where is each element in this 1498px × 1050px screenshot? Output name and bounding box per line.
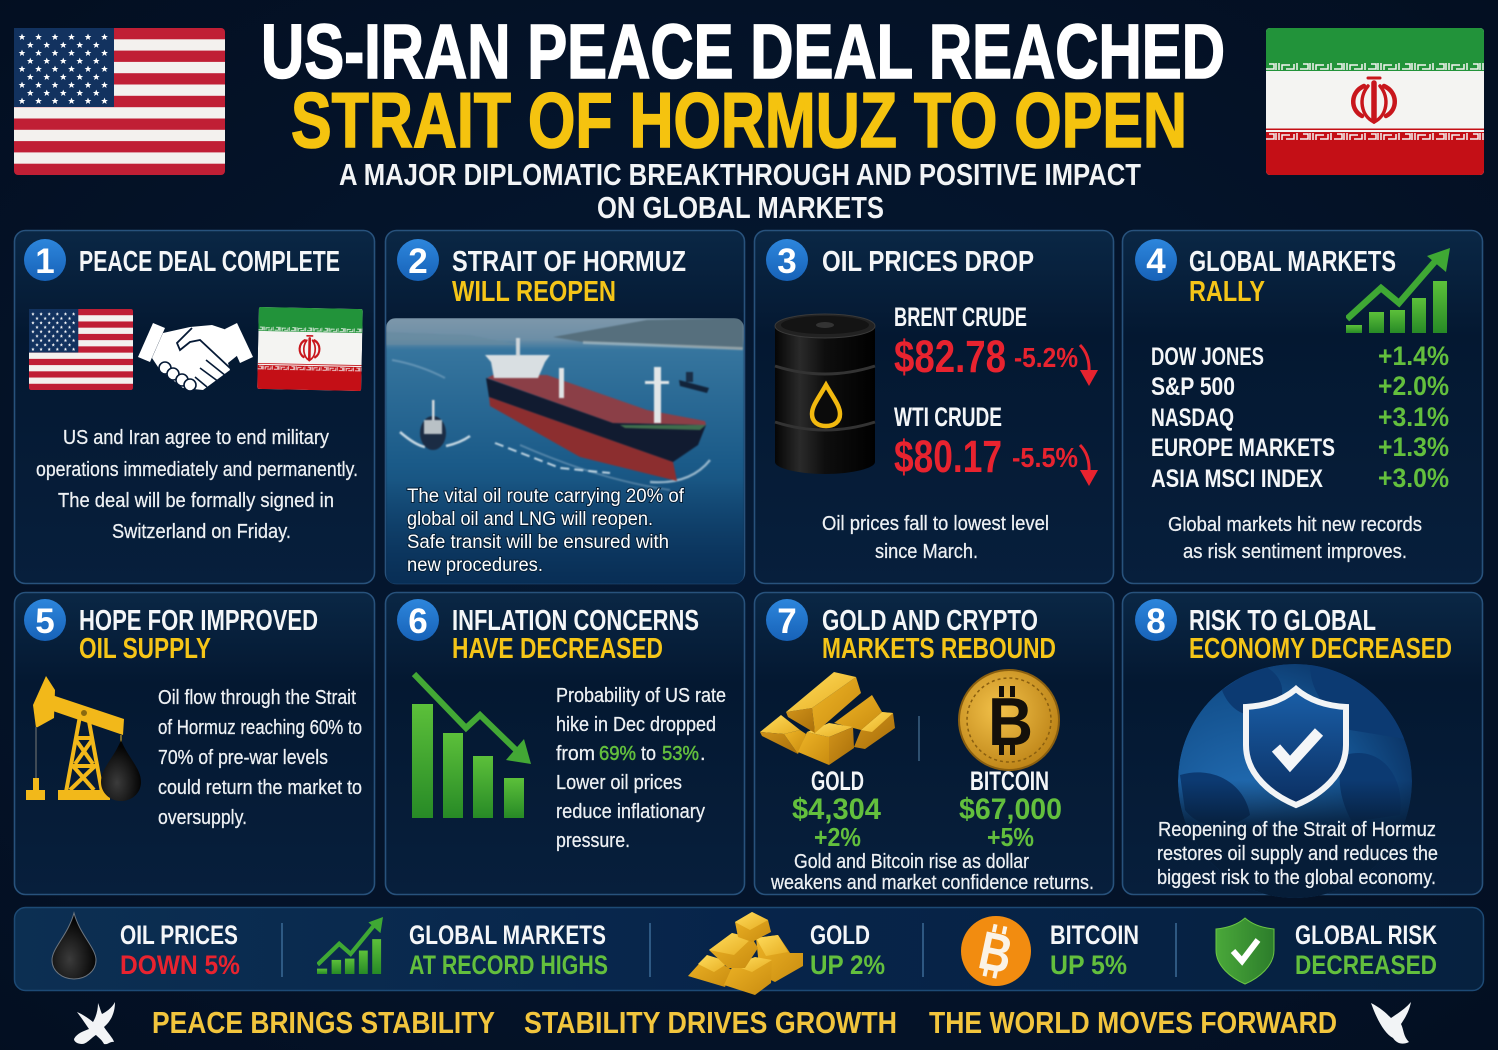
- icon: oil barrel: [775, 314, 875, 474]
- ship caption: global oil and LNG will reopen.: [407, 508, 653, 530]
- WTI crude price: -5.5%: [1012, 442, 1078, 473]
- summary: gold: [688, 912, 885, 995]
- body text 6: Lower oil prices: [556, 772, 682, 794]
- body text 6: [556, 685, 726, 852]
- body text 3: since March.: [875, 541, 978, 563]
- heading 5: HOPE FOR IMPROVED: [79, 605, 318, 637]
- body text 5: [158, 687, 362, 829]
- market index table: NASDAQ: [1151, 404, 1234, 432]
- number badge 2: [397, 239, 439, 281]
- body text 5: Oil flow through the Strait: [158, 687, 356, 709]
- summary: global markets: [317, 917, 608, 980]
- arrow: down: [1080, 345, 1098, 386]
- Brent crude price: -5.2%: [1014, 342, 1078, 373]
- icon: gold bars: [760, 672, 895, 765]
- ship text shade: [386, 512, 744, 584]
- number badge 2: 2: [408, 242, 428, 281]
- bitcoin price: [959, 766, 1062, 852]
- heading 7: [822, 605, 1056, 665]
- body text 1: The deal will be formally signed in: [58, 490, 334, 512]
- body text 4: [1168, 514, 1422, 563]
- WTI crude price: [894, 402, 1098, 486]
- chart: falling bars: [412, 674, 531, 818]
- icon: globe with shield: [1170, 664, 1420, 905]
- body text 5: of Hormuz reaching 60% to: [158, 717, 362, 739]
- number badge 4: 4: [1146, 242, 1166, 281]
- footer slogan: THE WORLD MOVES FORWARD: [929, 1005, 1337, 1040]
- ship caption: The vital oil route carrying 20% of: [407, 485, 685, 507]
- heading 8: [1189, 605, 1452, 665]
- title: [261, 9, 1225, 164]
- WTI crude price: WTI CRUDE: [894, 402, 1002, 432]
- icon: dove right: [1371, 1002, 1411, 1044]
- body text 1: US and Iran agree to end military: [63, 427, 329, 449]
- market index table: EUROPE MARKETS: [1151, 434, 1335, 462]
- body text 6: reduce inflationary: [556, 801, 705, 823]
- Brent crude price: [894, 302, 1098, 386]
- number badge 8: 8: [1146, 602, 1166, 641]
- market index table: S&P 500: [1151, 373, 1235, 401]
- summary: global risk: DECREASED: [1295, 950, 1437, 980]
- body text 4: as risk sentiment improves.: [1183, 541, 1407, 563]
- icon: bitcoin coin: [959, 670, 1059, 770]
- panel 7: gold and crypto: [754, 592, 1114, 894]
- shield: [1246, 689, 1346, 805]
- heading 1: PEACE DEAL COMPLETE: [79, 246, 340, 278]
- number badge 7: [766, 599, 808, 641]
- icon: green shield: [1216, 918, 1274, 984]
- footer slogan: PEACE BRINGS STABILITY: [152, 1005, 495, 1040]
- body text 8: Reopening of the Strait of Hormuz: [1158, 819, 1436, 841]
- body text 6: hike in Dec dropped: [556, 714, 716, 736]
- icon: oil pumpjack: [26, 676, 141, 801]
- WTI crude price: $80.17: [894, 431, 1002, 482]
- body text 5: 70% of pre-war levels: [158, 747, 328, 769]
- flag: Iran: [1266, 28, 1484, 175]
- body text 8: [1157, 819, 1438, 889]
- body text 8: restores oil supply and reduces the: [1157, 843, 1438, 865]
- summary: bitcoin: [961, 916, 1139, 986]
- gold price: [792, 766, 881, 852]
- heading 8: RISK TO GLOBAL: [1189, 605, 1376, 637]
- number badge 4: [1135, 239, 1177, 281]
- heading 6: [452, 605, 699, 665]
- small flag: Iran: [257, 307, 363, 391]
- market index table: ASIA MSCI INDEX: [1151, 465, 1323, 493]
- icon: bitcoin coin: B: [988, 684, 1033, 760]
- bitcoin price: BITCOIN: [970, 766, 1049, 796]
- icon: oil drop: [52, 913, 96, 979]
- body text 3: [822, 513, 1049, 563]
- number badge 3: [766, 239, 808, 281]
- title: STRAIT OF HORMUZ TO OPEN: [291, 76, 1187, 164]
- heading 2: WILL REOPEN: [452, 276, 616, 308]
- body text 5: could return the market to: [158, 777, 362, 799]
- flag: United States: [14, 28, 225, 175]
- icon: bitcoin: B: [974, 920, 1017, 986]
- summary: gold: UP 2%: [810, 950, 885, 980]
- panel 4: global markets rally: [1122, 230, 1482, 584]
- number badge 7: 7: [777, 602, 797, 641]
- number badge 3: 3: [777, 242, 797, 281]
- number badge 5: [24, 599, 66, 641]
- heading 4: [1189, 246, 1396, 308]
- arrow: down: [1080, 445, 1098, 486]
- icon: gold stack: [688, 912, 803, 995]
- small flag: United States: [29, 309, 133, 390]
- market index table: [1151, 341, 1449, 493]
- ship caption: Safe transit will be ensured with: [407, 531, 669, 553]
- subtitle: [339, 157, 1141, 225]
- summary: gold: GOLD: [810, 920, 870, 950]
- body text 3: Oil prices fall to lowest level: [822, 513, 1049, 535]
- gold price: GOLD: [811, 766, 864, 796]
- summary strip: [14, 908, 1484, 995]
- bitcoin price: +5%: [987, 822, 1034, 852]
- panel 8: global risk: [1122, 592, 1482, 905]
- icon: rising chart: [317, 917, 383, 974]
- body text 6: Probability of US rate: [556, 685, 726, 707]
- icon: bitcoin: [961, 916, 1031, 986]
- body text 7: [770, 851, 1094, 894]
- market index table: +1.3%: [1378, 432, 1449, 462]
- number badge 1: [24, 239, 66, 281]
- summary: bitcoin: BITCOIN: [1050, 920, 1139, 950]
- tanker hull: [486, 378, 706, 462]
- heading 2: [452, 246, 686, 308]
- market index table: +3.1%: [1378, 402, 1449, 432]
- ship caption: [407, 485, 685, 576]
- heading 6: INFLATION CONCERNS: [452, 605, 699, 637]
- body text 7: weakens and market confidence returns.: [770, 872, 1094, 894]
- heading 3: OIL PRICES DROP: [822, 246, 1034, 278]
- panel 1: peace deal complete: [14, 230, 374, 584]
- footer slogan: STABILITY DRIVES GROWTH: [524, 1005, 897, 1040]
- summary: bitcoin: UP 5%: [1050, 950, 1127, 980]
- body text 6: 69%: [599, 743, 636, 765]
- panel 6: inflation concerns: [386, 592, 744, 894]
- heading 2: STRAIT OF HORMUZ: [452, 246, 686, 278]
- check mark: [1276, 732, 1319, 764]
- number badge 6: 6: [408, 602, 428, 641]
- tugboats: [420, 416, 446, 450]
- market index table: +3.0%: [1378, 463, 1449, 493]
- Brent crude price: BRENT CRUDE: [894, 302, 1027, 332]
- title: US-IRAN PEACE DEAL REACHED: [261, 9, 1225, 95]
- summary: oil prices: OIL PRICES: [120, 920, 238, 950]
- body text 5: oversupply.: [158, 807, 247, 829]
- summary: oil prices: DOWN 5%: [120, 950, 240, 980]
- heading 6: HAVE DECREASED: [452, 633, 663, 665]
- body text 6: to: [641, 743, 656, 765]
- heading 5: OIL SUPPLY: [79, 633, 211, 665]
- body text 6: from: [556, 743, 595, 765]
- Brent crude price: $82.78: [894, 331, 1006, 382]
- panel 5: improved oil supply: [14, 592, 374, 894]
- summary: global markets: GLOBAL MARKETS: [409, 920, 606, 950]
- number badge 8: [1135, 599, 1177, 641]
- body text 6: pressure.: [556, 830, 630, 852]
- panel 2: strait of hormuz: [386, 230, 744, 584]
- panel 3: oil prices drop: [754, 230, 1114, 584]
- heading 7: GOLD AND CRYPTO: [822, 605, 1038, 637]
- body text 1: [36, 427, 358, 543]
- body text 8: biggest risk to the global economy.: [1157, 867, 1436, 889]
- body text 6: .: [700, 743, 706, 765]
- heading 7: MARKETS REBOUND: [822, 633, 1056, 665]
- summary: oil prices: [52, 913, 240, 980]
- market index table: DOW JONES: [1151, 343, 1264, 371]
- icon: handshake: [138, 323, 253, 391]
- ship caption: new procedures.: [407, 554, 543, 576]
- subtitle: ON GLOBAL MARKETS: [597, 190, 884, 225]
- body text 6: 53%: [662, 743, 699, 765]
- summary: global risk: GLOBAL RISK: [1295, 920, 1437, 950]
- body text 1: Switzerland on Friday.: [112, 521, 291, 543]
- heading 4: GLOBAL MARKETS: [1189, 246, 1396, 278]
- body text 4: Global markets hit new records: [1168, 514, 1422, 536]
- subtitle: A MAJOR DIPLOMATIC BREAKTHROUGH AND POSITIVE IMPACT: [339, 157, 1141, 192]
- market index table: +2.0%: [1378, 371, 1449, 401]
- gold price: +2%: [814, 822, 861, 852]
- body text 1: operations immediately and permanently.: [36, 459, 358, 481]
- market index table: +1.4%: [1378, 341, 1449, 371]
- body text 7: Gold and Bitcoin rise as dollar: [794, 851, 1029, 873]
- number badge 6: [397, 599, 439, 641]
- number badge 5: 5: [35, 602, 55, 641]
- gold price: $4,304: [792, 793, 881, 826]
- summary: global markets: AT RECORD HIGHS: [409, 950, 608, 980]
- summary: global risk: [1216, 918, 1437, 984]
- number badge 1: 1: [35, 242, 55, 281]
- heading 5: [79, 605, 318, 665]
- chart: rising bars: [1346, 248, 1450, 333]
- heading 4: RALLY: [1189, 276, 1265, 308]
- footer slogan: [152, 1005, 1337, 1040]
- bitcoin price: $67,000: [959, 793, 1062, 826]
- image: oil tanker in the strait: [386, 318, 744, 584]
- icon: dove left: [74, 1002, 115, 1044]
